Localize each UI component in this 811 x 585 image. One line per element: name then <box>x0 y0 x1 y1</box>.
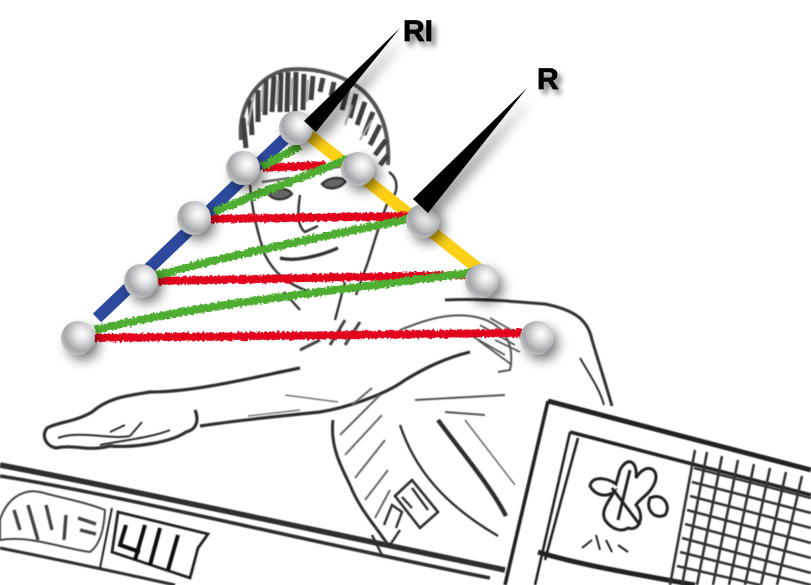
sketch: monitor data grid <box>670 450 811 585</box>
sketch: outstretched arm and hand <box>44 352 470 448</box>
sketch: desk edge lines <box>0 465 505 585</box>
blue edge line <box>97 132 292 318</box>
pointer: RI <box>304 28 406 139</box>
label: RI: RI <box>407 20 437 53</box>
label: RI: RI <box>403 15 433 48</box>
label: R: R <box>541 68 563 101</box>
sphere markers <box>61 111 558 360</box>
sketch: monitor molecule and caption <box>582 462 667 552</box>
sphere shadows <box>67 118 558 360</box>
red connecting strokes <box>88 165 525 338</box>
right chain spheres <box>341 152 554 355</box>
sketch: monitor frame <box>505 401 811 585</box>
sketch: shoulder and shirt <box>300 299 612 406</box>
yellow edge line <box>300 128 480 270</box>
green connecting strokes <box>95 146 475 330</box>
sketch: person hair <box>241 69 388 165</box>
sketch: torso and badge <box>332 388 515 555</box>
sketch: desk logos <box>0 491 208 578</box>
sketch: person face <box>250 166 396 320</box>
left chain spheres <box>61 111 313 355</box>
label: R: R <box>537 63 559 96</box>
pointer: R <box>413 88 534 220</box>
